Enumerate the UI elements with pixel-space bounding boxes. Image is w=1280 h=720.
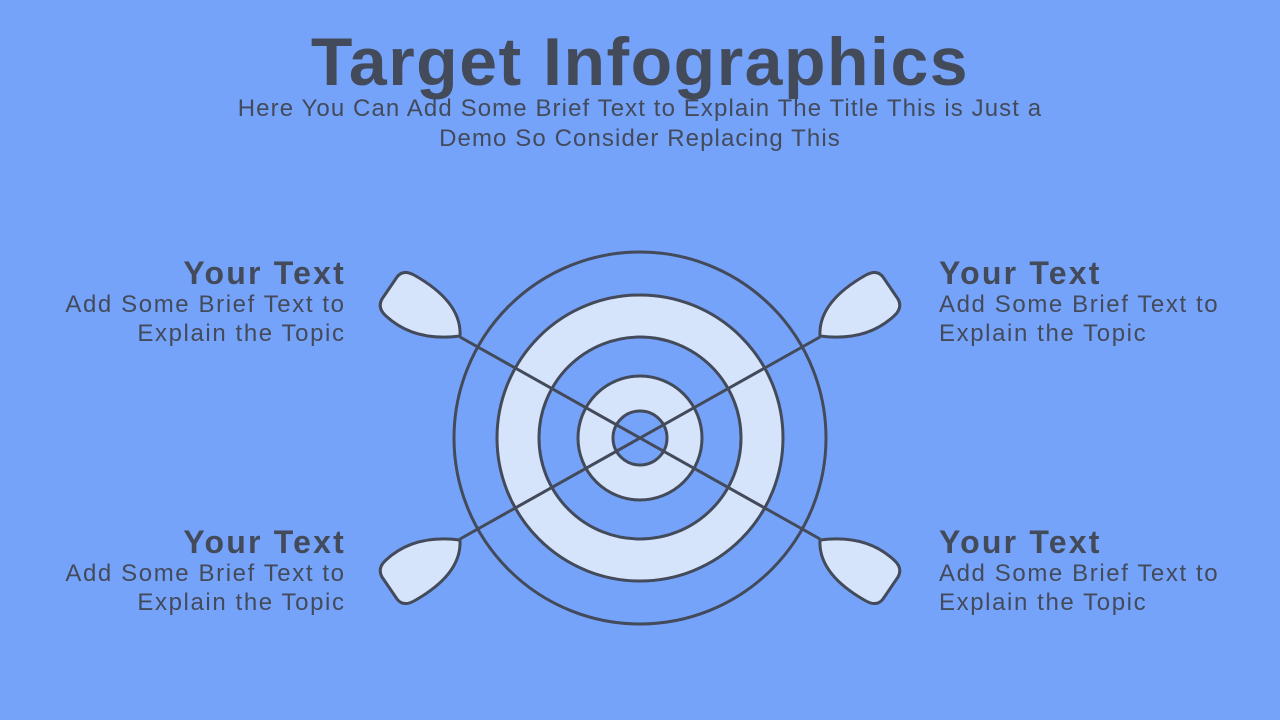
text block: bottom right: Explain the Topic <box>939 589 1147 616</box>
arrow shafts <box>460 337 820 539</box>
text block: bottom right <box>939 524 1219 616</box>
text block: top left: Explain the Topic <box>137 320 346 347</box>
text block: bottom left: Your Text <box>183 524 346 560</box>
text block: bottom left: Explain the Topic <box>137 589 346 616</box>
text block: bottom right: Your Text <box>939 524 1102 560</box>
text block: top left: Add Some Brief Text to <box>65 291 346 318</box>
subtitle: Demo So Consider Replacing This <box>439 125 841 152</box>
text block: top right: Explain the Topic <box>939 320 1147 347</box>
text block: top right: Your Text <box>939 255 1102 291</box>
text block: bottom right: Add Some Brief Text to <box>939 560 1219 587</box>
text block: top right <box>939 255 1219 347</box>
text block: bottom left: Add Some Brief Text to <box>65 560 346 587</box>
subtitle: Here You Can Add Some Brief Text to Explain The Title This is Just a <box>238 95 1042 122</box>
text block: top left <box>65 255 346 347</box>
dart fletchings <box>380 272 900 604</box>
subtitle <box>238 95 1042 152</box>
target rings <box>454 252 826 624</box>
text block: top right: Add Some Brief Text to <box>939 291 1219 318</box>
text block: top left: Your Text <box>183 255 346 291</box>
text block: bottom left <box>65 524 346 616</box>
title: Target Infographics <box>311 24 969 100</box>
